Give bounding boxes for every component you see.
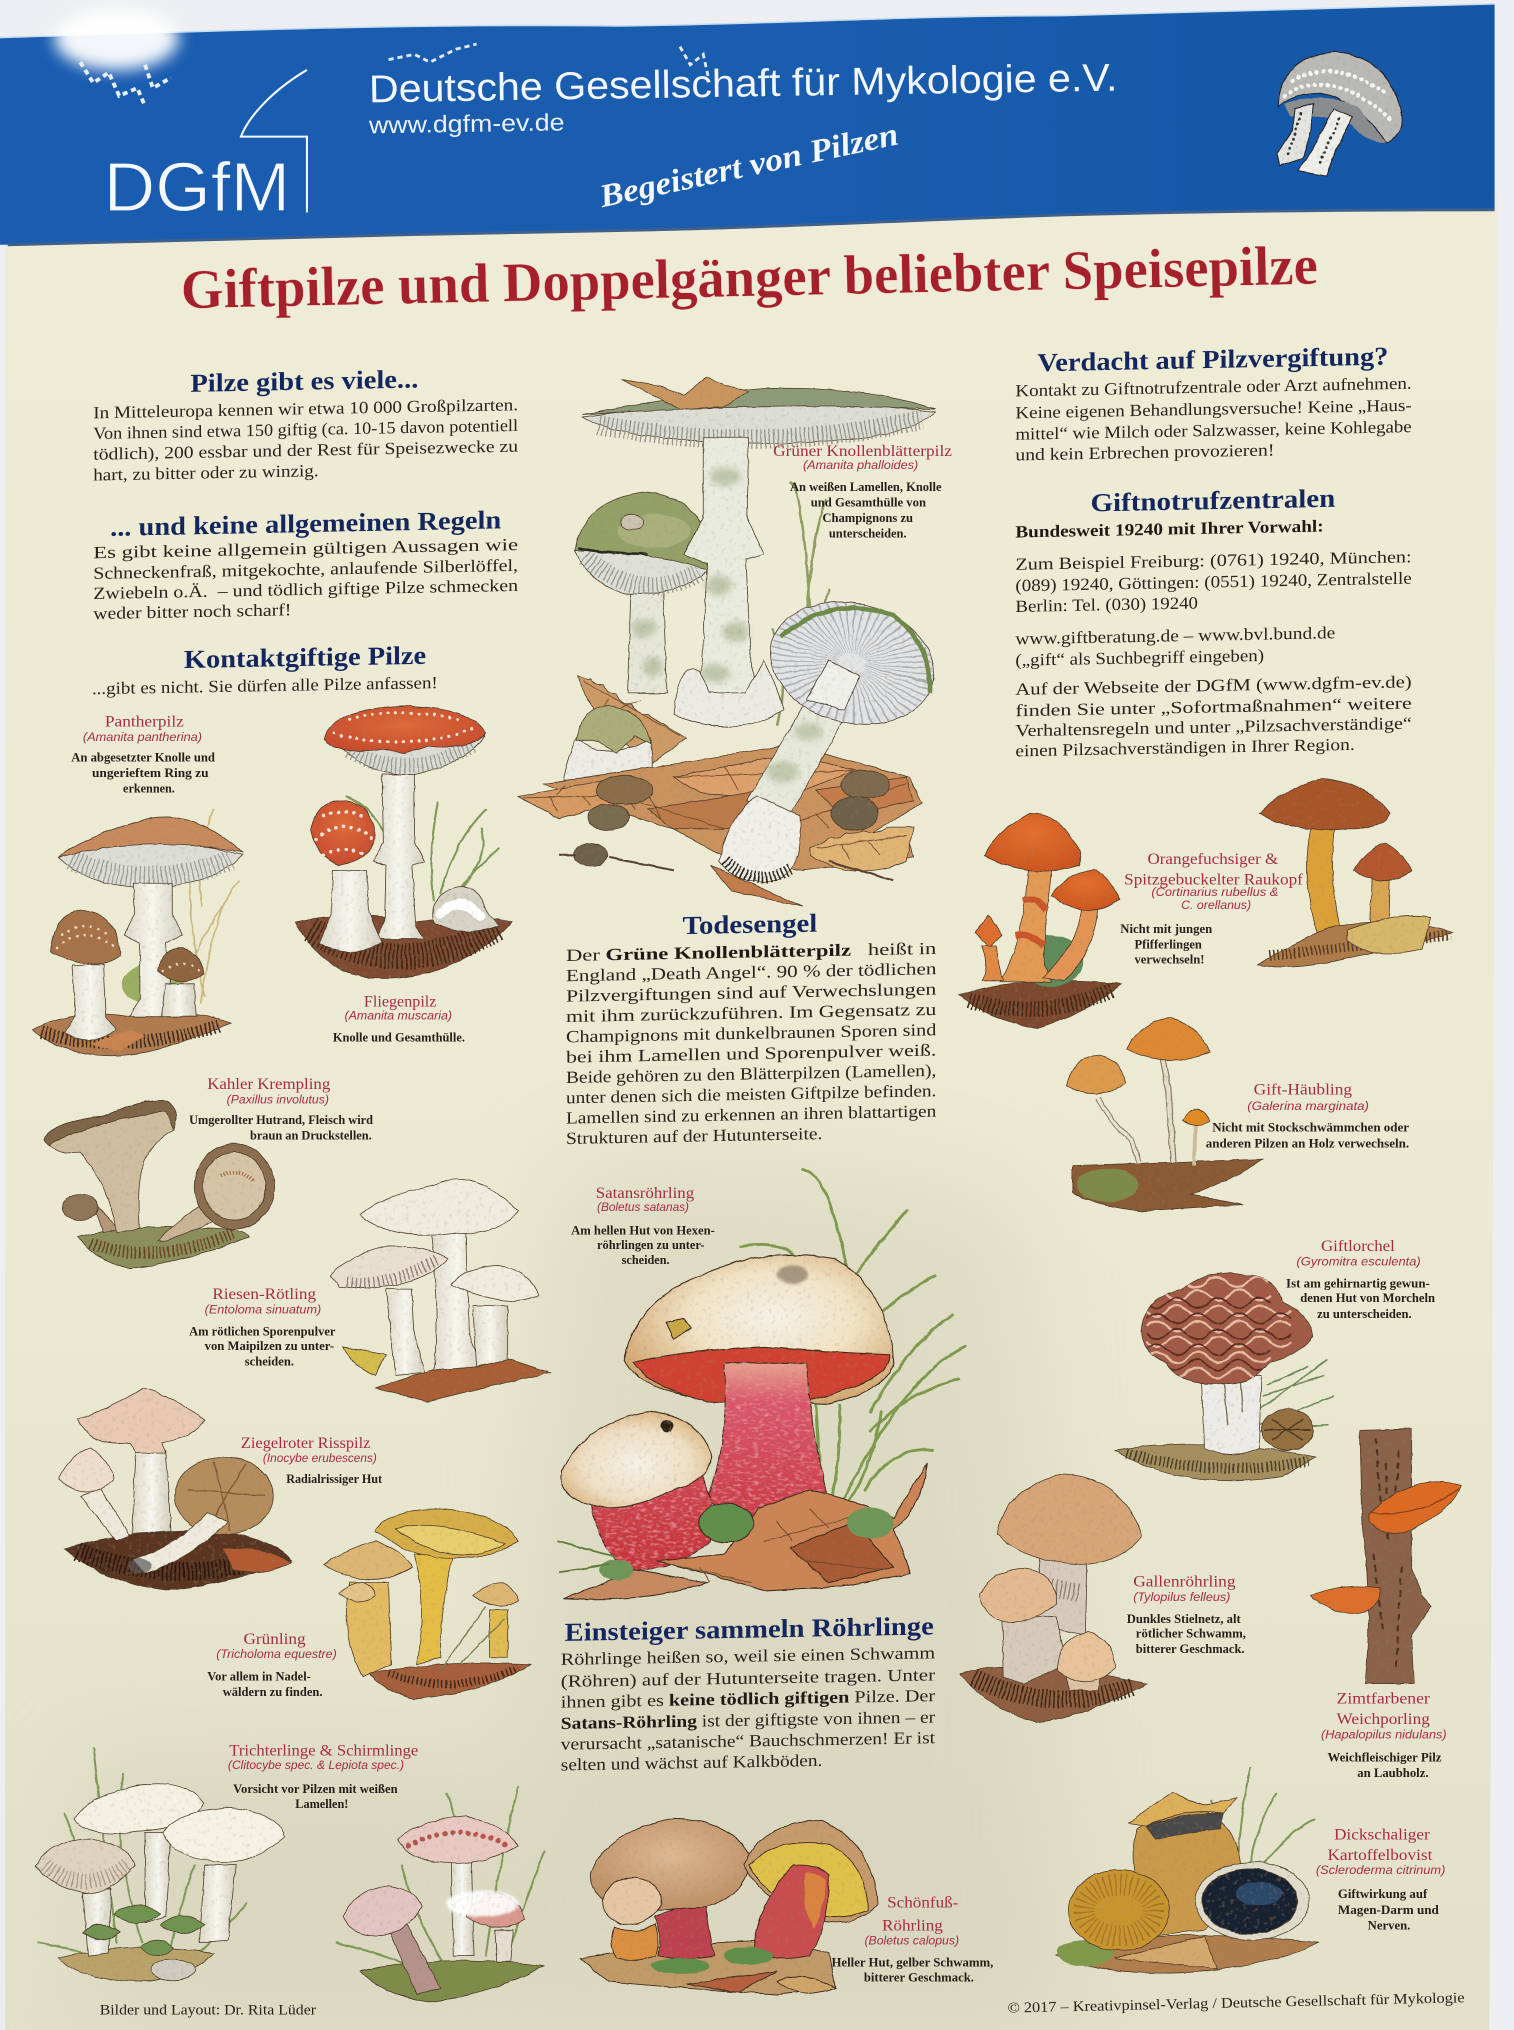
illustration: Grünling <box>324 1509 531 1699</box>
label: Gallenröhrling: rötlicher Schwamm, <box>1136 1627 1246 1641</box>
illustration: Giftlorchel <box>1115 1273 1334 1481</box>
label: Raukopf: Spitzgebuckelter Raukopf <box>1124 872 1304 889</box>
text block: Verdacht auf Pilzvergiftung: und kein Erbrechen provozieren! <box>1015 440 1274 464</box>
label: Giftlorchel: zu unterscheiden. <box>1317 1307 1412 1321</box>
label: Grünling: Grünling <box>243 1631 306 1648</box>
label: Satansröhrling: (Boletus satanas) <box>597 1202 689 1214</box>
text block: Pilze gibt es viele: Pilze gibt es viele... <box>190 364 418 398</box>
illustration: Gift-Häubling <box>1066 1018 1263 1211</box>
text block: Giftnotrufzentralen: einen Pilzsachverständigen in Ihrer Region. <box>1015 735 1355 760</box>
illustration: Fliegenpilz <box>295 706 512 979</box>
text block: Giftnotrufzentralen <box>1015 482 1412 760</box>
text block: Verdacht auf Pilzvergiftung: mittel“ wie Milch oder Salzwasser, keine Kohlegabe <box>1015 417 1412 444</box>
illustration: Dickschaliger Kartoffelbovist <box>1056 1768 1318 1973</box>
illustration: Zimtfarbener Weichporling <box>1311 1429 1461 1684</box>
label: Giftlorchel <box>1286 1238 1435 1321</box>
illustration: Pantherpilz <box>32 809 242 1056</box>
label: Satansröhrling: Am hellen Hut von Hexen- <box>571 1223 715 1237</box>
label: Pantherpilz <box>71 714 215 796</box>
label: Ziegelroter Risspilz: (Inocybe erubescens) <box>263 1453 377 1465</box>
label: Grüner Knollenblätterpilz <box>773 443 952 540</box>
text block: Giftnotrufzentralen: finden Sie unter „Sofortmaßnahmen“ weitere <box>1015 694 1412 720</box>
label: Schönfuß-Röhrling: Schönfuß- <box>887 1895 958 1912</box>
header: organisation name: Deutsche Gesellschaft für Mykologie e.V. <box>369 57 1118 111</box>
label: Kahler Krempling: (Paxillus involutus) <box>227 1094 329 1106</box>
label: Schönfuß-Röhrling: Heller Hut, gelber Schwamm, <box>831 1956 993 1970</box>
label: Dickschaliger Kartoffelbovist: Dickschaliger <box>1334 1827 1430 1844</box>
label: Riesen-Rötling: (Entoloma sinuatum) <box>205 1304 321 1316</box>
label: Satansröhrling: röhrlingen zu unter- <box>597 1238 705 1252</box>
credit line: Bilder und Layout: Dr. Rita Lüder <box>100 2003 316 2019</box>
label: Kahler Krempling <box>189 1076 373 1143</box>
text block: Verdacht auf Pilzvergiftung: Kontakt zu Giftnotrufzentrale oder Arzt aufnehmen. <box>1015 374 1412 400</box>
label: Kahler Krempling: Umgerollter Hutrand, Fleisch wird <box>189 1113 373 1127</box>
label: Gift-Häubling: Gift-Häubling <box>1254 1081 1353 1098</box>
label: Pantherpilz: Pantherpilz <box>105 714 184 731</box>
title: Giftpilze und Doppelgänger beliebter Speisepilze <box>180 235 1318 321</box>
text block: keine allgemeinen Regeln <box>93 505 519 623</box>
label: Grünling: (Tricholoma equestre) <box>216 1649 337 1661</box>
label: Grünling: wäldern zu finden. <box>223 1685 322 1699</box>
label: Ziegelroter Risspilz: Ziegelroter Risspilz <box>241 1435 371 1452</box>
text block: keine allgemeinen Regeln: Zwiebeln o.Ä. – und tödlich giftige Pilze schmecken <box>93 576 519 603</box>
label: Dickschaliger Kartoffelbovist: Kartoffelbovist <box>1328 1847 1433 1864</box>
label: Satansröhrling: scheiden. <box>622 1253 670 1267</box>
label: Giftlorchel: Giftlorchel <box>1321 1238 1395 1255</box>
text block: keine allgemeinen Regeln: ... und keine allgemeinen Regeln <box>110 505 501 542</box>
text block: Pilze gibt es viele: Von ihnen sind etwa 150 giftig (ca. 10-15 davon potentiell <box>93 416 518 443</box>
text block: Einsteiger sammeln Röhrlinge: (Röhren) auf der Hutunterseite tragen. Unter <box>561 1665 935 1691</box>
text block: Verdacht auf Pilzvergiftung <box>1015 341 1412 464</box>
text block: Verdacht auf Pilzvergiftung: Verdacht auf Pilzvergiftung? <box>1037 342 1388 377</box>
label: Grüner Knollenblätterpilz: An weißen Lamellen, Knolle <box>790 480 942 494</box>
text block: Einsteiger sammeln Röhrlinge: verursacht „satanische“ Bauchschmerzen! Er ist <box>561 1728 935 1754</box>
header band <box>0 4 1495 245</box>
label: Grüner Knollenblätterpilz: Grüner Knollenblätterpilz <box>773 443 952 460</box>
label: Dickschaliger Kartoffelbovist: (Scleroderma citrinum) <box>1316 1865 1446 1877</box>
label: Gallenröhrling: Gallenröhrling <box>1133 1574 1236 1591</box>
copyright line: © 2017 – Kreativpinsel-Verlag / Deutsche Gesellschaft für Mykologie <box>1007 1990 1465 2017</box>
label: Raukopf: Orangefuchsiger & <box>1147 851 1278 868</box>
label: Raukopf: (Cortinarius rubellus & <box>1151 887 1279 899</box>
text block: Einsteiger sammeln Röhrlinge: Einsteiger sammeln Röhrlinge <box>565 1611 934 1647</box>
label: Grüner Knollenblätterpilz: und Gesamthülle von <box>811 495 926 509</box>
label: Raukopf: Pfifferlingen <box>1135 938 1202 952</box>
label: Zimtfarbener Weichporling: Zimtfarbener <box>1337 1691 1430 1708</box>
label: Riesen-Rötling <box>189 1286 336 1369</box>
label: Grüner Knollenblätterpilz: Champignons zu <box>822 511 913 525</box>
logo: DGfM <box>104 70 307 226</box>
text block: Todesengel: Pilzvergiftungen sind auf Verwechslungen <box>566 980 937 1006</box>
label: Schönfuß-Röhrling <box>831 1895 993 1985</box>
label: Riesen-Rötling: Riesen-Rötling <box>212 1286 316 1303</box>
illustration: Spitzgebuckelter Raukopf <box>1258 778 1453 967</box>
text block: Todesengel: England „Death Angel“. 90 % der tödlichen <box>566 959 937 985</box>
text block: Todesengel <box>566 906 937 1148</box>
text block: Giftnotrufzentralen: (089) 19240, Göttingen: (0551) 19240, Zentralstelle <box>1015 569 1412 595</box>
text block: Giftnotrufzentralen: Giftnotrufzentralen <box>1090 484 1335 517</box>
label: Gallenröhrling <box>1127 1574 1246 1656</box>
label: Riesen-Rötling: scheiden. <box>245 1355 294 1369</box>
label: Fliegenpilz: Fliegenpilz <box>364 993 437 1010</box>
label: Giftlorchel: Ist am gehirnartig gewun- <box>1286 1276 1430 1290</box>
label: Gift-Häubling: anderen Pilzen an Holz verwechseln. <box>1206 1136 1409 1150</box>
label: Pantherpilz: erkennen. <box>123 782 175 796</box>
text block: Einsteiger sammeln Röhrlinge: Satans-Röhrling ist der giftigste von ihnen – er <box>561 1707 935 1733</box>
text block: Giftnotrufzentralen: Berlin: Tel. (030) 19240 <box>1015 593 1198 616</box>
label: Fliegenpilz: (Amanita muscaria) <box>345 1010 452 1022</box>
label: Kahler Krempling: Kahler Krempling <box>207 1076 331 1093</box>
label: Riesen-Rötling: Am rötlichen Sporenpulver <box>189 1324 336 1338</box>
label: Zimtfarbener Weichporling: Weichporling <box>1337 1711 1430 1728</box>
text block: Giftnotrufzentralen: Zum Beispiel Freiburg: (0761) 19240, München: <box>1015 547 1412 574</box>
label: Dickschaliger Kartoffelbovist: Nerven. <box>1368 1919 1410 1933</box>
illustration: Trichterlinge <box>35 1748 285 1982</box>
illustration: Kahler Krempling <box>44 1101 275 1269</box>
illustration: Riesen-Rötling <box>330 1179 550 1401</box>
text block: keine allgemeinen Regeln: Es gibt keine allgemein gültigen Aussagen wie <box>93 535 518 562</box>
label: Pantherpilz: An abgesetzter Knolle und <box>71 751 215 765</box>
text block: Giftnotrufzentralen: Verhaltensregeln und unter „Pilzsachverständige“ <box>1015 714 1412 740</box>
illustration: Schönfuß-Röhrling <box>580 1818 878 1995</box>
logo: DGfM: DGfM <box>104 148 290 226</box>
text block: Verdacht auf Pilzvergiftung: Keine eigenen Behandlungsversuche! Keine „Haus- <box>1015 396 1412 422</box>
text block: Kontaktgiftige Pilze <box>92 641 438 698</box>
text block: Todesengel: Todesengel <box>683 909 817 940</box>
label: Trichterlinge & Schirmlinge: (Clitocybe spec. & Lepiota spec.) <box>228 1760 404 1772</box>
text block: Todesengel: Champignons mit dunkelbraunen Sporen sind <box>566 1020 937 1046</box>
text block: Pilze gibt es viele: In Mitteleuropa kennen wir etwa 10 000 Großpilzarten. <box>93 395 518 422</box>
label: Schönfuß-Röhrling: bitterer Geschmack. <box>864 1971 974 1985</box>
label: Dickschaliger Kartoffelbovist: Magen-Darm und <box>1338 1903 1439 1917</box>
label: Gallenröhrling: Dunkles Stielnetz, alt <box>1127 1612 1242 1626</box>
label: Dickschaliger Kartoffelbovist <box>1316 1827 1446 1933</box>
label: Schönfuß-Röhrling: Röhrling <box>882 1917 943 1934</box>
label: Gallenröhrling: bitterer Geschmack. <box>1136 1642 1245 1656</box>
text block: Einsteiger sammeln Röhrlinge <box>561 1611 936 1774</box>
label: Gift-Häubling: (Galerina marginata) <box>1247 1101 1369 1113</box>
illustration: Grüner Knollenblätterpilz <box>518 378 947 907</box>
text block: Kontaktgiftige Pilze: ...gibt es nicht. Sie dürfen alle Pilze anfassen! <box>92 673 438 698</box>
label: Raukopf <box>1120 851 1304 967</box>
label: Grünling <box>207 1631 337 1699</box>
illustration: Schirmlinge <box>337 1787 544 2002</box>
text block: Einsteiger sammeln Röhrlinge: selten und wächst auf Kalkböden. <box>561 1751 822 1774</box>
text block: Pilze gibt es viele: hart, zu bitter oder zu winzig. <box>93 461 319 485</box>
label: Satansröhrling: Satansröhrling <box>596 1185 695 1202</box>
text block: Giftnotrufzentralen: („gift“ als Suchbegriff eingeben) <box>1015 646 1264 670</box>
label: Raukopf: C. orellanus) <box>1181 900 1251 912</box>
text block: Giftnotrufzentralen: www.giftberatung.de – www.bvl.bund.de <box>1015 623 1335 648</box>
text block: Kontaktgiftige Pilze: Kontaktgiftige Pilze <box>184 641 426 674</box>
label: Trichterlinge & Schirmlinge: Vorsicht vor Pilzen mit weißen <box>233 1782 398 1796</box>
illustration: Orangefuchsiger Raukopf <box>960 813 1122 1028</box>
text block: Einsteiger sammeln Röhrlinge: ihnen gibt es keine tödlich giftigen Pilze. Der <box>561 1686 935 1712</box>
text block: Todesengel: unter denen sich die meisten Giftpilze befinden. <box>566 1081 936 1107</box>
illustration: Satansröhrling <box>557 1170 965 1599</box>
label: Schönfuß-Röhrling: (Boletus calopus) <box>864 1936 959 1948</box>
text block: Todesengel: Der Grüne Knollenblätterpilz heißt in <box>566 939 937 965</box>
label: Zimtfarbener Weichporling: an Laubholz. <box>1357 1766 1429 1780</box>
text block: Pilze gibt es viele <box>93 363 519 485</box>
icon: header mushroom <box>1277 52 1402 176</box>
label: Trichterlinge & Schirmlinge <box>228 1743 419 1811</box>
text block: Einsteiger sammeln Röhrlinge: Röhrlinge heißen so, weil sie einen Schwamm <box>561 1643 936 1669</box>
label: Raukopf: Nicht mit jungen <box>1120 922 1212 936</box>
label: Dickschaliger Kartoffelbovist: Giftwirkung auf <box>1338 1887 1428 1901</box>
label: Giftlorchel: denen Hut von Morcheln <box>1300 1291 1435 1305</box>
label: Trichterlinge & Schirmlinge: Trichterlinge & Schirmlinge <box>229 1743 419 1760</box>
label: Zimtfarbener Weichporling: Weichfleischiger Pilz <box>1328 1750 1442 1764</box>
label: Zimtfarbener Weichporling <box>1321 1691 1447 1780</box>
text block: Todesengel: Strukturen auf der Hutunterseite. <box>566 1124 822 1148</box>
label: Ziegelroter Risspilz <box>241 1435 383 1486</box>
label: Gallenröhrling: (Tylopilus felleus) <box>1133 1592 1231 1604</box>
text block: Pilze gibt es viele: tödlich), 200 essbar und der Rest für Speisezwecke zu <box>93 437 519 464</box>
text block: Todesengel: Lamellen sind zu erkennen an ihren blattartigen <box>566 1102 937 1128</box>
label: Pantherpilz: ungerieftem Ring zu <box>92 766 209 780</box>
label: Riesen-Rötling: von Maipilzen zu unter- <box>205 1339 334 1353</box>
label: Gift-Häubling: Nicht mit Stockschwämmchen oder <box>1212 1120 1410 1134</box>
text block: keine allgemeinen Regeln: Schneckenfraß, mitgekochte, anlaufende Silberlöffel, <box>93 556 518 583</box>
label: Fliegenpilz <box>333 993 465 1044</box>
label: Ziegelroter Risspilz: Radialrissiger Hut <box>286 1472 383 1486</box>
text block: Todesengel: bei ihm Lamellen und Sporenpulver weiß. <box>566 1041 936 1067</box>
text block: keine allgemeinen Regeln: weder bitter noch scharf! <box>93 600 291 623</box>
illustration: Ziegelroter Risspilz <box>58 1388 291 1590</box>
label: Kahler Krempling: braun an Druckstellen. <box>250 1129 372 1143</box>
text block: Todesengel: mit ihm zurückzuführen. Im Gegensatz zu <box>566 1000 937 1026</box>
label: Pantherpilz: (Amanita pantherina) <box>83 732 202 744</box>
header: website: www.dgfm-ev.de <box>368 109 565 139</box>
label: Grüner Knollenblätterpilz: (Amanita phalloides) <box>803 460 918 472</box>
label: Fliegenpilz: Knolle und Gesamthülle. <box>333 1030 465 1044</box>
label: Grünling: Vor allem in Nadel- <box>207 1669 311 1683</box>
label: Giftlorchel: (Gyromitra esculenta) <box>1296 1256 1421 1268</box>
label: Grüner Knollenblätterpilz: unterscheiden. <box>829 526 907 540</box>
label: Gift-Häubling <box>1206 1081 1410 1150</box>
illustration: Gallenröhrling <box>961 1474 1146 1723</box>
label: Zimtfarbener Weichporling: (Hapalopilus nidulans) <box>1321 1730 1447 1742</box>
text block: Giftnotrufzentralen: Auf der Webseite der DGfM (www.dgfm-ev.de) <box>1015 672 1412 699</box>
text block: Giftnotrufzentralen: Bundesweit 19240 mit Ihrer Vorwahl: <box>1015 517 1324 541</box>
label: Satansröhrling <box>571 1185 715 1267</box>
label: Trichterlinge & Schirmlinge: Lamellen! <box>295 1797 348 1811</box>
text block: Todesengel: Beide gehören zu den Blätterpilzen (Lamellen), <box>566 1061 936 1087</box>
label: Raukopf: verwechseln! <box>1135 953 1204 967</box>
header: slogan: Begeistert von Pilzen <box>595 117 902 215</box>
